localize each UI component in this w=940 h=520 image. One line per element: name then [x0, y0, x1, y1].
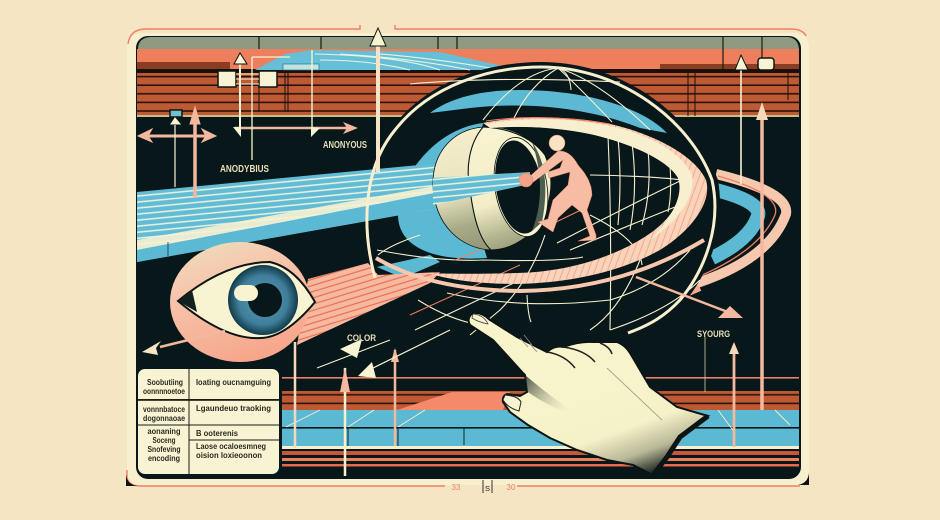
footer scale marks: S: [485, 484, 490, 493]
eye: [170, 242, 315, 362]
main dark panel: [136, 28, 801, 479]
table: right column labels: Lgaundeuo traoking: [196, 403, 271, 413]
label: anonymous: ANONYOUS: [323, 140, 367, 151]
vertical arrows in lower section: [295, 337, 739, 476]
pink beam from eye to globe: [297, 263, 440, 345]
arrow cluster: upper left: [138, 107, 216, 198]
white marker boxes and connectors: [170, 58, 774, 117]
arrow from eye to lower left: [142, 331, 225, 355]
top banding: grey, orange and brown strata: [137, 37, 799, 117]
frame corner marks: [126, 473, 809, 486]
globe: thin coral chord lines: [410, 208, 585, 315]
label: color: COLOR: [347, 333, 376, 344]
beam entering sphere: [433, 172, 530, 205]
globe: black halo and blue inner arcs: [364, 62, 720, 340]
label: syourg: SYOURG: [697, 329, 730, 340]
table: left column labels: [143, 377, 185, 463]
lower stripes and blue floor: [282, 377, 799, 466]
table: left column labels: Snofeving: [148, 444, 180, 454]
table: left column labels: oonnnnoetoe: [143, 386, 185, 396]
table: right column labels: Ioating oucnamguing: [196, 377, 271, 387]
blue beam: [137, 163, 440, 262]
table: right column labels: oision loxieoonon: [196, 450, 262, 460]
table: right column labels: B ooterenis: [196, 428, 238, 438]
tall arrow crossing frame: [370, 28, 386, 172]
arrow from globe to lower right: [636, 277, 743, 318]
data table: [138, 369, 279, 474]
globe: wire grid: [377, 68, 700, 335]
table: right column labels: [196, 377, 271, 460]
arrow cluster: upper centre: [233, 50, 358, 160]
footer scale marks: 30: [507, 483, 516, 492]
outer orbit rings: [510, 174, 786, 326]
frame: outer coral register line: [127, 25, 806, 486]
footer scale marks: [452, 480, 516, 493]
footer scale marks: 33: [452, 483, 461, 492]
table: left column labels: vonnnbatoce: [143, 404, 185, 414]
table: left column labels: encoding: [148, 453, 180, 463]
table: left column labels: Soceng: [152, 435, 176, 445]
table: left column labels: aonaning: [148, 426, 180, 436]
pink ring inside globe: [376, 118, 707, 291]
frame: cream panel border: [127, 33, 809, 485]
globe rim: [367, 67, 715, 333]
table: right column labels: Laose ocaloesmneg: [196, 441, 266, 451]
person reaching into the sphere: [519, 135, 596, 241]
label: anodybius: ANODYBIUS: [220, 164, 269, 175]
arrows: upper right: [735, 55, 768, 410]
table: left column labels: Soobutiing: [147, 377, 183, 387]
blue wave on horizon: [255, 50, 520, 70]
sphere cup: [433, 127, 555, 250]
table: left column labels: dogonnaoae: [143, 413, 185, 423]
pointing hand: [469, 313, 708, 475]
diagonal arrows pointing to colour label: [317, 330, 450, 378]
